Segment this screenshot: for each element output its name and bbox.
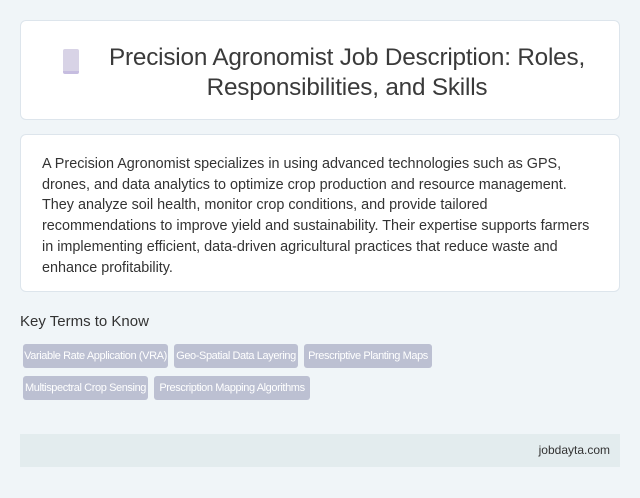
description text: in implementing efficient, data-driven agricultural practices that reduce waste and — [42, 239, 558, 255]
heading: key terms: Key Terms to Know — [20, 313, 149, 330]
description panel — [20, 134, 620, 292]
description text: enhance profitability. — [42, 260, 173, 276]
footer — [20, 434, 620, 467]
description text: drones, and data analytics to optimize crop production and resource management. — [42, 177, 567, 193]
key terms tags: Prescription Mapping Algorithms — [159, 382, 305, 394]
title: Precision Agronomist Job Description: Roles, Responsibilities, and Skills — [109, 44, 585, 101]
key terms tags — [23, 344, 432, 400]
key terms tags: Multispectral Crop Sensing — [25, 382, 146, 394]
description text — [42, 156, 589, 276]
key terms tags: Geo-Spatial Data Layering — [176, 350, 296, 362]
icon: document — [63, 49, 79, 74]
key terms tags: Prescriptive Planting Maps — [308, 350, 428, 362]
description text: recommendations to improve yield and sustainability. Their expertise supports farmers — [42, 218, 589, 234]
footer: jobdayta.com — [539, 443, 610, 457]
title panel — [20, 20, 620, 120]
description text: A Precision Agronomist specializes in using advanced technologies such as GPS, — [42, 156, 561, 172]
description text: They analyze soil health, monitor crop conditions, and provide tailored — [42, 197, 488, 213]
key terms tags: Variable Rate Application (VRA) — [24, 350, 167, 362]
